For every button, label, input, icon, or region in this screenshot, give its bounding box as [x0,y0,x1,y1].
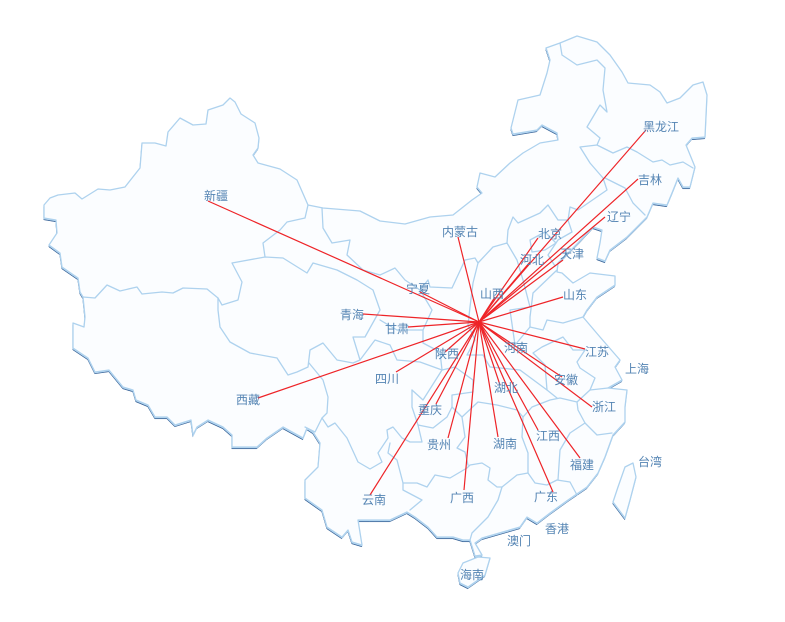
province labels: 黑龙江 [643,120,679,134]
province labels: 海南 [460,567,484,582]
province labels: 广西 [450,491,474,505]
province labels: 香港 [545,522,569,536]
province labels: 西藏 [236,393,260,407]
province labels [204,120,679,582]
province labels: 吉林 [638,173,662,187]
province labels: 辽宁 [607,209,631,224]
province labels: 甘肃 [385,322,409,336]
province labels: 安徽 [554,372,578,387]
province labels: 浙江 [592,400,616,414]
province labels: 重庆 [418,403,442,417]
province labels: 湖北 [494,380,518,395]
province labels: 天津 [560,247,584,261]
province labels: 湖南 [493,436,517,451]
province labels: 新疆 [204,188,228,203]
province labels: 四川 [375,372,399,386]
province labels: 台湾 [638,454,662,469]
province labels: 河北 [520,253,544,267]
province labels: 云南 [362,492,386,507]
map landmass [44,36,707,587]
province labels: 青海 [340,307,364,322]
province labels: 宁夏 [406,281,430,296]
map bevel [44,37,707,588]
province labels: 上海 [625,361,649,376]
province labels: 陕西 [435,346,459,361]
province labels: 贵州 [427,438,451,452]
province labels: 福建 [570,457,594,472]
provincial borders [83,43,693,540]
province labels: 河南 [504,340,528,355]
province labels: 江苏 [585,345,609,359]
map shadow [44,38,707,589]
province labels: 广东 [534,490,558,504]
radial lines from hub [208,130,646,495]
province labels: 山西 [480,287,504,301]
province labels: 澳门 [507,533,531,548]
province labels: 内蒙古 [442,224,478,239]
province labels: 山东 [563,288,587,302]
province labels: 北京 [538,227,562,241]
province labels: 江西 [536,429,560,443]
